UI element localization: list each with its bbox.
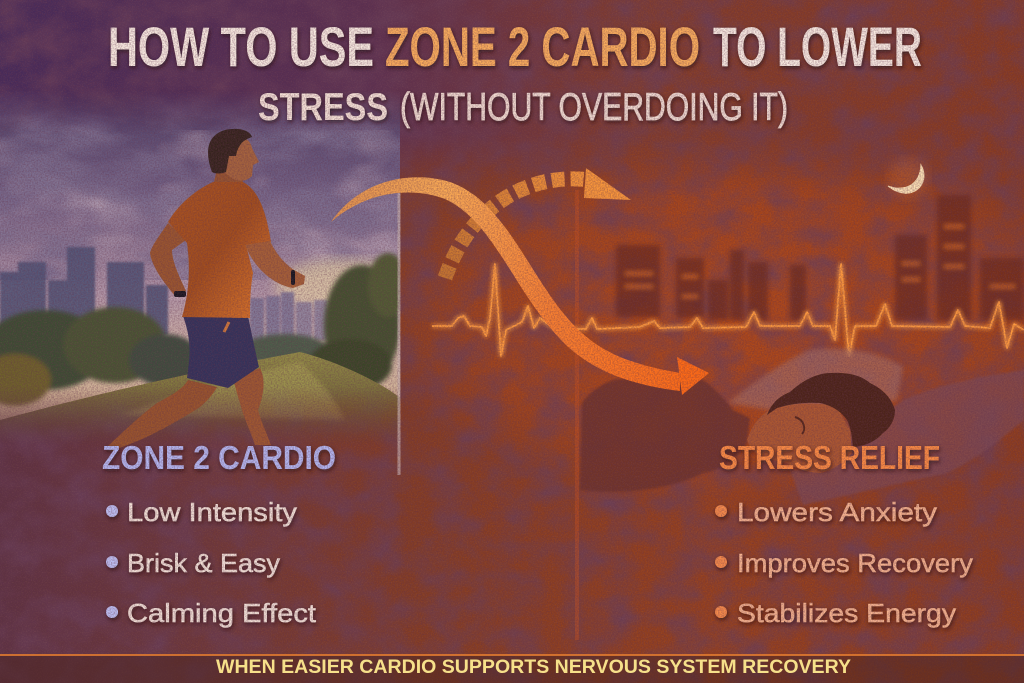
trees [0, 253, 408, 406]
grass hill [0, 352, 400, 440]
city skyline [616, 195, 1024, 320]
front pillow [790, 370, 1024, 505]
list: benefits: Stabilizes Energy [737, 598, 956, 628]
head [216, 135, 259, 181]
arrow: dashed rising arrow [445, 168, 631, 278]
closed eye [795, 417, 804, 434]
panel: Stress Relief list [715, 439, 973, 628]
list: benefits: Lowers Anxiety [737, 497, 937, 527]
front arm [245, 241, 305, 288]
panel: right night city scene [616, 195, 1024, 320]
arrow: S-curve descending arrow [331, 177, 709, 395]
neck [213, 165, 243, 186]
heading: ZONE 2 CARDIO [385, 15, 700, 78]
heading: Zone 2 Cardio: ZONE 2 CARDIO [102, 439, 336, 476]
city skyline [0, 247, 328, 342]
panel: left park scene [0, 96, 400, 430]
list: benefits [715, 497, 973, 628]
list: benefits: Brisk & Easy [127, 548, 280, 578]
hair [208, 129, 252, 174]
footer banner [0, 654, 1024, 683]
heading: (WITHOUT OVERDOING IT) [400, 86, 788, 129]
heading: TO LOWER [713, 15, 922, 78]
dividers [399, 190, 577, 640]
back leg [108, 380, 217, 451]
chart: ECG heartbeat line [432, 264, 1024, 356]
list: benefits [106, 497, 317, 628]
footer banner: WHEN EASIER CARDIO SUPPORTS NERVOUS SYSTEM RECOVERY [216, 657, 851, 678]
torso shirt [168, 182, 271, 318]
heading: Stress Relief: STRESS RELIEF [719, 439, 940, 476]
back arm [150, 223, 186, 297]
list: benefits: Improves Recovery [737, 548, 973, 578]
face [747, 404, 852, 473]
icon: runner [108, 129, 305, 451]
list: benefits: Calming Effect [127, 598, 317, 628]
heading: STRESS [258, 86, 388, 129]
shorts [183, 316, 259, 388]
body [580, 377, 750, 492]
heading: HOW TO USE [108, 15, 374, 78]
icon: sleeping person [580, 349, 1024, 505]
list: benefits: Low Intensity [127, 497, 297, 527]
icon: crescent moon [888, 158, 928, 198]
panel: Zone 2 Cardio list [102, 439, 336, 628]
back pillow [728, 349, 903, 410]
hair [767, 373, 895, 447]
front leg [233, 368, 271, 445]
heading [108, 15, 922, 129]
